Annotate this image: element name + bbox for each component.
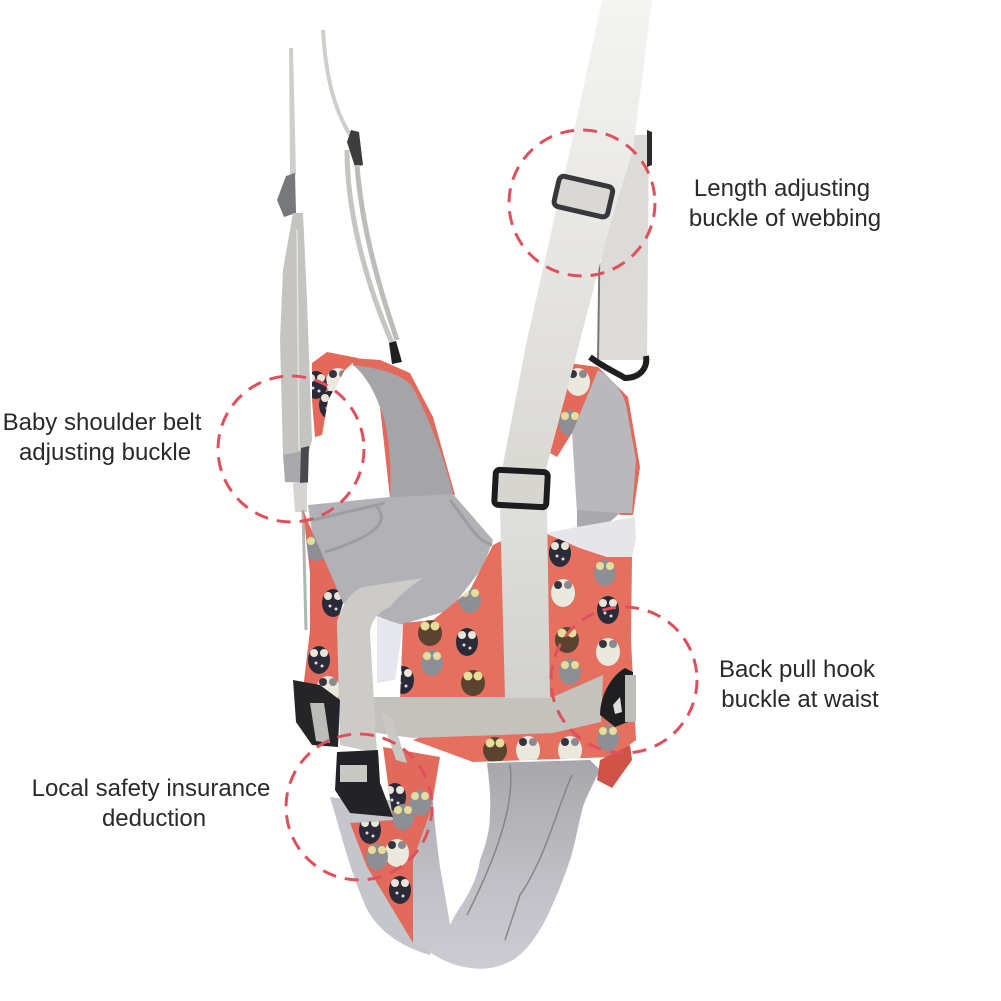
left thin strap and clip	[277, 48, 312, 630]
label: back pull hook: Back pull hook	[719, 656, 876, 683]
harness product illustration	[277, 0, 652, 969]
left band of seat	[330, 797, 440, 955]
buckle: chest adjuster	[494, 470, 548, 507]
waist belt	[340, 675, 603, 738]
waist pad under loop	[377, 617, 403, 683]
safety buckle	[335, 750, 393, 817]
callout circle: safety deduction	[286, 734, 432, 880]
label: baby shoulder belt: adjusting buckle	[19, 439, 191, 466]
left shoulder pad	[353, 358, 455, 498]
front loop strap	[337, 578, 423, 753]
hook: back pull	[600, 668, 636, 727]
red body	[303, 510, 636, 943]
small silver buckle	[380, 713, 407, 763]
label: back pull hook: buckle at waist	[721, 686, 879, 713]
owl print	[305, 368, 620, 904]
label: length adjusting buckle: buckle of webbing	[689, 205, 881, 232]
label: local safety insurance: Local safety insurance	[32, 775, 270, 802]
front webbing strap upper	[500, 0, 652, 480]
seat pad	[308, 494, 493, 625]
label: local safety insurance: deduction	[102, 805, 206, 832]
buckle: webbing adjuster	[553, 175, 614, 218]
callout circle: webbing buckle	[509, 130, 655, 276]
left shoulder flap	[312, 352, 358, 437]
front webbing strap lower	[500, 508, 550, 698]
callout circle: back pull hook	[551, 607, 697, 753]
seat band	[413, 757, 600, 969]
hook: right shoulder	[590, 356, 646, 378]
right white pad	[547, 517, 636, 557]
label: length adjusting buckle: Length adjusting	[694, 175, 870, 202]
second thin strap and clip	[323, 30, 402, 364]
rear webbing strap	[597, 135, 649, 360]
waist side buckle	[293, 680, 340, 747]
label: baby shoulder belt: Baby shoulder belt	[3, 409, 202, 436]
callout circle: shoulder belt buckle	[218, 376, 364, 522]
right shoulder pad	[550, 363, 640, 528]
